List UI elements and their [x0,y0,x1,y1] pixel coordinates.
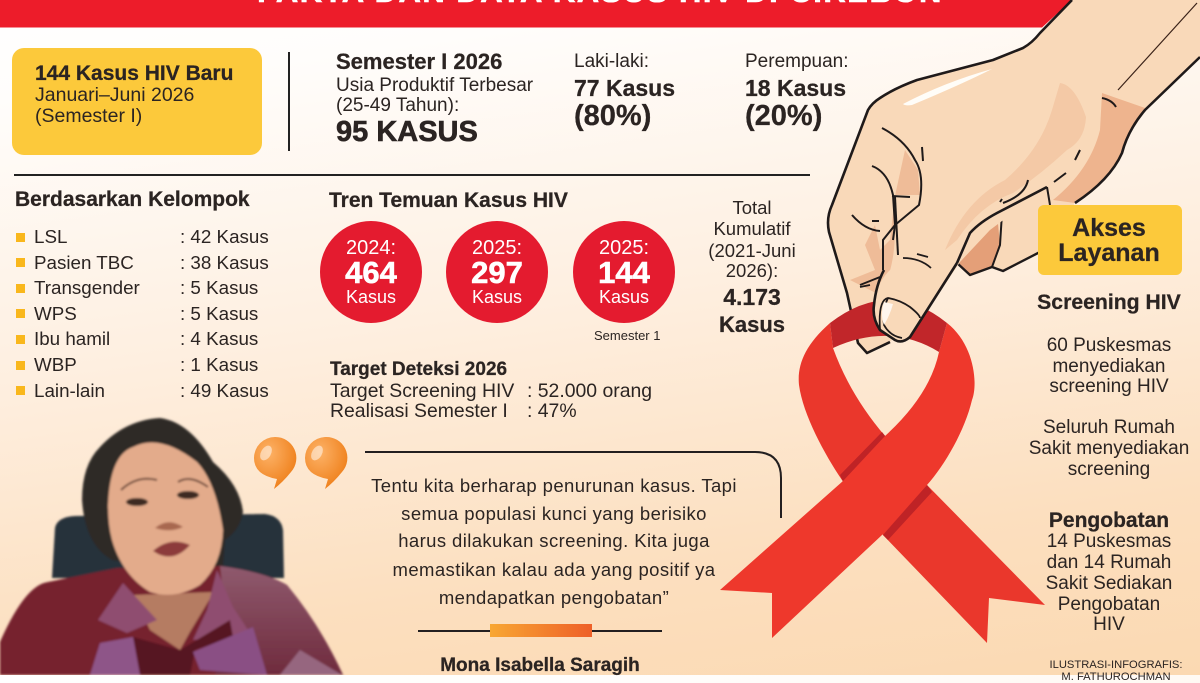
service access heading: Layanan [1058,239,1160,267]
service access heading [1038,205,1182,275]
group list: : 5 Kasus [180,277,258,298]
group list: : 5 Kasus [180,302,258,324]
group list: : 4 Kasus [180,328,258,349]
male stat: (80%) [574,100,651,132]
service access details: Screening HIV [1037,291,1181,314]
service access details: Sakit Sediakan [1046,573,1172,594]
summary text: 144 Kasus HIV Baru [35,62,233,85]
group list: Lain-lain [34,380,105,400]
speaker name: Mona Isabella Saragih [440,655,640,676]
detection target: : 52.000 orang [527,380,652,402]
speaker divider [418,624,662,637]
face [108,442,223,595]
illustration credit: ILUSTRASI-INFOGRAFIS: [1049,659,1183,671]
quote text: mendapatkan pengobatan” [439,587,669,608]
summary text: Januari–Juni 2026 [35,84,194,106]
service access details: 60 Puskesmas [1047,335,1171,356]
semester stats: 95 KASUS [336,116,478,148]
service access details: dan 14 Rumah [1047,552,1171,573]
circle 2025: Kasus [472,287,522,307]
circle 2024: 2024: [346,237,396,259]
female stat: Perempuan: [745,51,849,72]
quote text: memastikan kalau ada yang positif ya [393,559,715,580]
cumulative total: Kumulatif [713,218,791,239]
semester stats: Usia Produktif Terbesar [336,74,533,96]
hand [828,0,1200,353]
shirt [0,566,343,675]
summary text: (Semester I) [35,104,142,126]
detection target: Realisasi Semester I [330,400,508,422]
detection target: Target Screening HIV [330,380,514,402]
circle 2025 semester 1 [573,221,675,323]
group list: : 42 Kasus [180,226,269,247]
yellow summary box [12,48,262,155]
circle 2025 semester 1: 144 [598,255,650,290]
group list: Pasien TBC [34,252,134,272]
trend heading: Tren Temuan Kasus HIV [329,189,568,212]
circle 2024: Kasus [346,287,396,307]
chair [52,514,284,578]
group list [15,188,269,400]
detection target: Target Deteksi 2026 [330,359,507,380]
semester stats: (25-49 Tahun): [336,94,459,116]
group list: Transgender [34,277,140,298]
circle 2025 semester 1: 2025: [599,237,649,259]
cumulative total: 4.173 [723,284,781,310]
service access heading: Akses [1072,214,1146,242]
male stat [574,51,675,132]
quote text [371,475,737,608]
circle 2024 [320,221,422,323]
title banner [0,0,1070,28]
male stat: 77 Kasus [574,74,675,100]
cumulative total: (2021-Juni [708,240,796,261]
hair [82,418,243,580]
quote text: semua populasi kunci yang berisiko [401,503,707,524]
illustration credit [1049,659,1183,683]
group list: WPS [34,302,77,324]
quote text: harus dilakukan screening. Kita juga [398,530,710,551]
service access details: Seluruh Rumah [1043,417,1175,438]
semester stats [336,49,533,148]
service access details: Pengobatan [1049,509,1169,532]
circle 2025 semester 1: Kasus [599,287,649,307]
service access details: menyediakan [1052,356,1166,377]
cumulative total: Total [732,197,772,218]
circle 2024: 464 [345,255,397,290]
female stat: 18 Kasus [745,74,846,100]
circle 2025: 297 [471,255,523,290]
circle 2025 [446,221,548,323]
quote text: Tentu kita berharap penurunan kasus. Tapi [371,475,737,496]
group list: WBP [34,354,77,375]
cumulative total: 2026): [726,260,778,281]
male stat: Laki-laki: [574,51,649,72]
female stat [745,51,849,132]
text: M. FATHUROCHMAN [1061,671,1171,683]
group list: Ibu hamil [34,328,110,349]
service access details: 14 Puskesmas [1047,531,1171,552]
group list: : 1 Kasus [180,354,258,375]
service access details: Sakit menyediakan [1029,438,1189,459]
semester stats: Semester I 2026 [336,49,502,74]
detection target [330,359,652,422]
group list: : 38 Kasus [180,252,269,272]
service access details: Pengobatan [1058,594,1160,615]
service access details: screening HIV [1049,376,1169,397]
circle 2025: 2025: [472,237,522,259]
cumulative total [708,197,796,337]
thumb [860,187,1047,341]
semester note: Semester 1 [594,328,660,343]
collar and batik [98,583,157,633]
summary text [35,62,233,126]
group list: : 49 Kasus [180,380,269,400]
group list: Berdasarkan Kelompok [15,188,250,211]
service access details [1029,291,1189,635]
female stat: (20%) [745,100,822,132]
neck [133,592,214,650]
ribbon [720,300,1045,643]
detection target: : 47% [527,400,577,422]
service access details: HIV [1093,614,1125,635]
cumulative total: Kasus [719,312,785,337]
service access details: screening [1068,459,1150,480]
group list: LSL [34,226,67,247]
